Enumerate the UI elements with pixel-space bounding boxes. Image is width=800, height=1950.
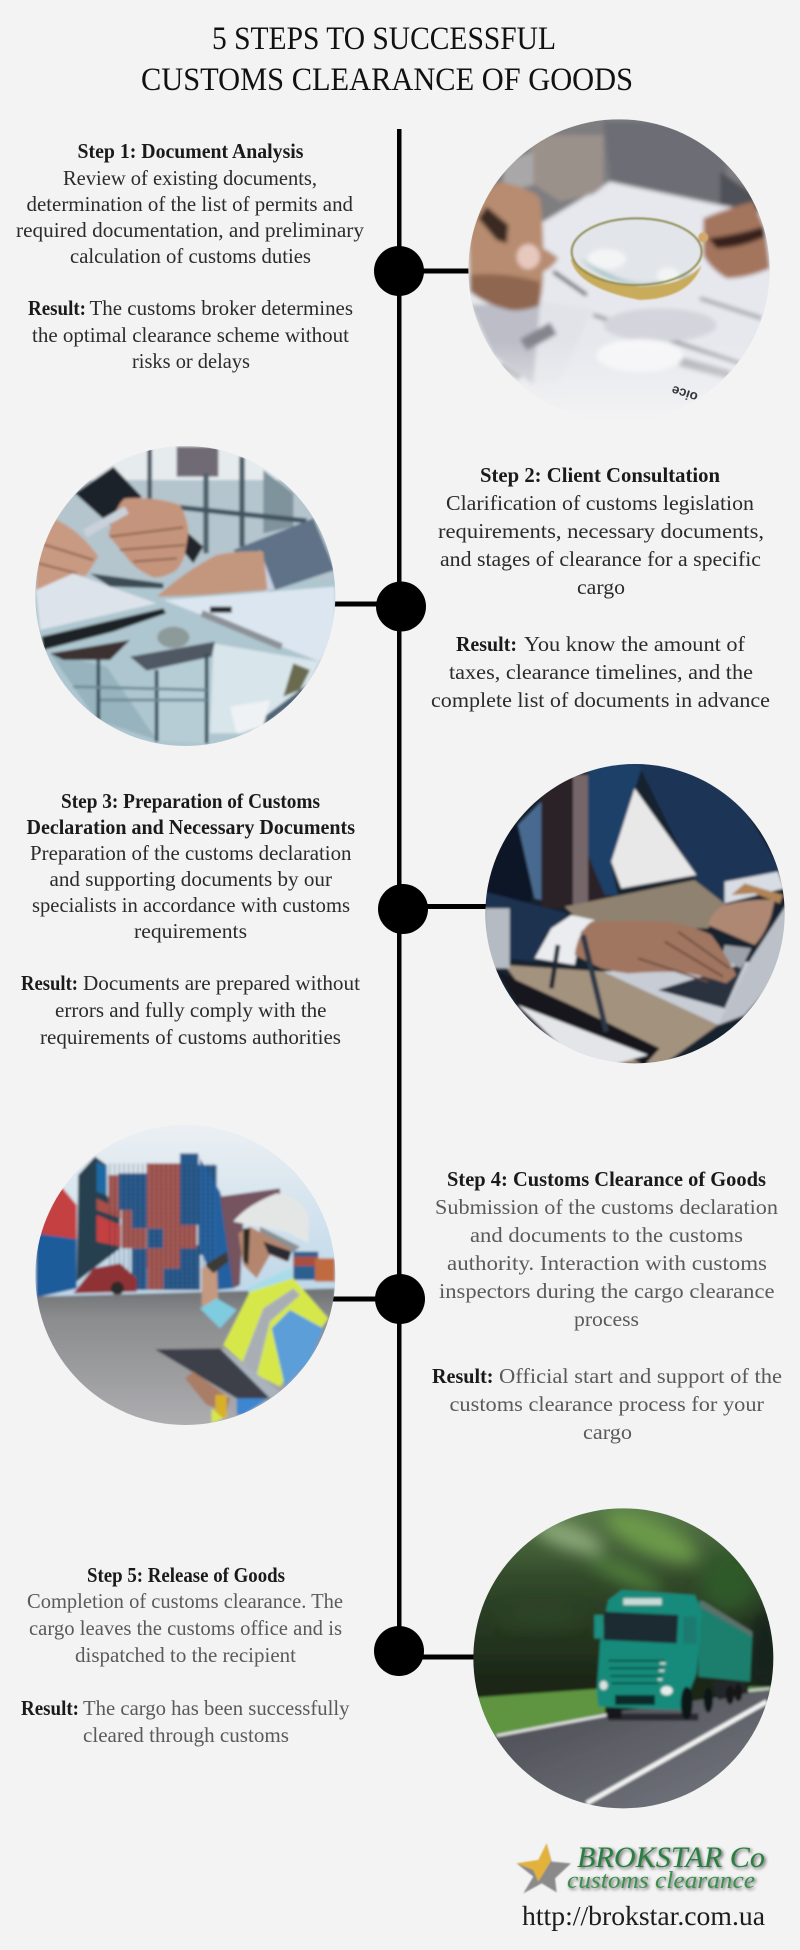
step 4 result: customs clearance process for your — [450, 1392, 764, 1416]
step 3 heading: Declaration and Necessary Documents — [26, 815, 355, 839]
photo 3: businessman typing on laptop — [485, 764, 785, 1064]
step 1 text — [16, 139, 364, 373]
step 3 description: requirements — [134, 919, 247, 943]
step 2 result: complete list of documents in advance — [431, 688, 770, 712]
step 1 description: Review of existing documents, — [63, 166, 317, 190]
step 3 description: and supporting documents by our — [50, 867, 332, 891]
step 3 heading: Step 3: Preparation of Customs — [61, 789, 320, 813]
title: CUSTOMS CLEARANCE OF GOODS — [141, 62, 633, 98]
step 2 description: and stages of clearance for a specific — [440, 547, 761, 571]
step 2 text — [431, 463, 770, 712]
step 4 result: Result: — [432, 1364, 494, 1388]
step 4 node and connector — [333, 1274, 425, 1324]
step 2 result: taxes, clearance timelines, and the — [449, 660, 753, 684]
step 4 description: inspectors during the cargo clearance — [439, 1279, 774, 1303]
step 5 result — [21, 1696, 350, 1747]
step 3 node and connector — [378, 884, 487, 934]
step 2 result: You know the amount of — [524, 632, 745, 656]
step 4 result: Official start and support of the — [499, 1364, 782, 1388]
photo 5: green truck on road — [473, 1508, 774, 1808]
step 1 node and connector — [374, 246, 470, 296]
step 1 description — [16, 166, 364, 268]
step 5 node and connector — [374, 1626, 475, 1676]
step 5 heading: Step 5: Release of Goods — [87, 1563, 285, 1587]
step 4 result: cargo — [583, 1420, 632, 1444]
title — [141, 21, 633, 98]
step 5 result: cleared through customs — [83, 1723, 289, 1747]
step 5 description: cargo leaves the customs office and is — [29, 1616, 342, 1640]
step 2 description — [438, 491, 764, 599]
logo tagline: customs clearance — [567, 1868, 755, 1894]
photo 4: inspector at container terminal — [35, 1129, 336, 1425]
step 1 result — [28, 296, 353, 373]
step 1 description: calculation of customs duties — [70, 244, 311, 268]
step 3 result — [21, 971, 360, 1049]
document word on photo: oice — [670, 383, 700, 405]
step 2 description: Clarification of customs legislation — [446, 491, 755, 515]
website url: http://brokstar.com.ua — [522, 1901, 765, 1931]
step 4 description — [435, 1195, 779, 1331]
step 4 heading: Step 4: Customs Clearance of Goods — [447, 1167, 766, 1191]
step 4 result — [432, 1364, 782, 1444]
step 2 description: cargo — [577, 575, 625, 599]
photo 1: magnifying glass over document — [468, 119, 770, 400]
step 1 description: required documentation, and preliminary — [16, 218, 364, 242]
step 5 description: Completion of customs clearance. The — [27, 1589, 343, 1613]
step 1 result: risks or delays — [132, 349, 250, 373]
step 2 description: requirements, necessary documents, — [438, 519, 764, 543]
timeline vertical line — [397, 129, 402, 1651]
step 2 heading: Step 2: Client Consultation — [480, 463, 720, 487]
step 2 result: Result: — [456, 632, 517, 656]
step 2 result — [431, 632, 770, 712]
step 3 result: Documents are prepared without — [83, 971, 360, 995]
step 1 result: Result: — [28, 296, 86, 320]
step 3 result: errors and fully comply with the — [55, 998, 327, 1022]
step 2 node and connector — [334, 582, 426, 632]
step 4 description: authority. Interaction with customs — [447, 1251, 767, 1275]
step 1 description: determination of the list of permits and — [26, 192, 353, 216]
step 3 text — [21, 789, 360, 1049]
step 4 description: and documents to the customs — [470, 1223, 743, 1247]
step 3 description — [30, 841, 352, 943]
step 5 description — [27, 1589, 343, 1667]
step 3 description: specialists in accordance with customs — [32, 893, 350, 917]
step 5 result: The cargo has been successfully — [83, 1696, 350, 1720]
step 4 description: process — [574, 1307, 639, 1331]
step 3 result: Result: — [21, 971, 78, 995]
step 5 description: dispatched to the recipient — [75, 1643, 296, 1667]
step 5 result: Result: — [21, 1696, 79, 1720]
step 4 description: Submission of the customs declaration — [435, 1195, 779, 1219]
step 1 result: the optimal clearance scheme without — [32, 323, 349, 347]
logo company name: BROKSTAR Co — [577, 1841, 765, 1874]
logo star — [517, 1843, 571, 1893]
logo — [517, 1841, 765, 1894]
title: 5 STEPS TO SUCCESSFUL — [212, 21, 556, 57]
step 3 heading — [26, 789, 355, 839]
step 3 result: requirements of customs authorities — [40, 1025, 341, 1049]
step 3 description: Preparation of the customs declaration — [30, 841, 352, 865]
step 5 text — [21, 1563, 350, 1747]
step 1 result: The customs broker determines — [90, 296, 353, 320]
step 1 heading: Step 1: Document Analysis — [78, 139, 304, 163]
step 4 text — [432, 1167, 782, 1444]
photo 2: handshake over documents — [35, 446, 336, 746]
